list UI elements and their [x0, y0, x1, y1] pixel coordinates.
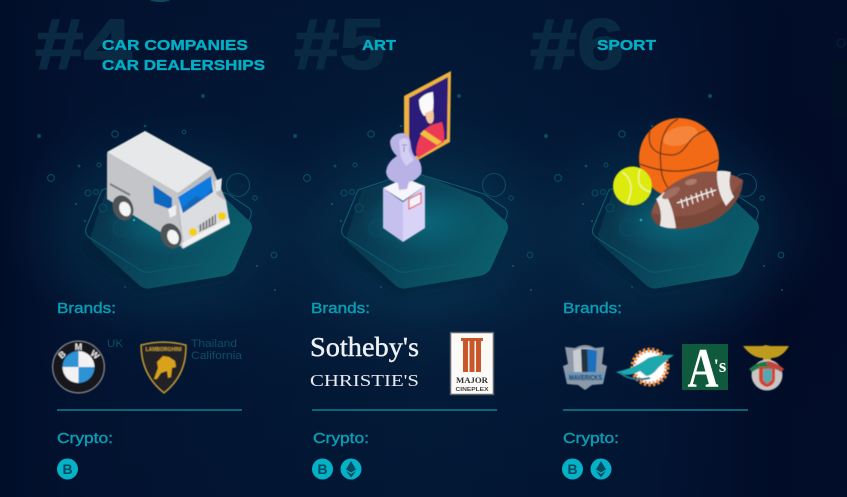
label: brands: Brands:: [57, 300, 116, 317]
logo: Christie's: CHRISTIE'S: [310, 371, 419, 390]
logo: Benfica: [743, 345, 789, 390]
panel: sport: [530, 6, 789, 480]
icon: tennis ball: [613, 166, 652, 206]
icon: bitcoin: [312, 458, 333, 480]
icon: bitcoin: B: [62, 461, 73, 477]
logo: Miami Dolphins: [616, 350, 674, 384]
hexagon platform: [544, 94, 784, 293]
icon: bitcoin: [57, 458, 78, 480]
logo: Major Cineplex: [450, 332, 494, 394]
rank number 4: #4: [35, 6, 133, 85]
logo: BMW: [52, 341, 104, 393]
logo: Oakland Athletics: A: [688, 338, 719, 400]
logo: BMW: M: [75, 342, 82, 352]
logo: Sotheby's: Sotheby's: [310, 332, 419, 362]
heading: car companies: [102, 37, 265, 74]
icon: ethereum: [590, 458, 612, 480]
rank number 6: #6: [530, 6, 624, 85]
logo: BMW: W: [88, 348, 102, 362]
logo: Dallas Mavericks: [563, 345, 607, 390]
logo: BMW: B: [56, 348, 68, 361]
logo: Dallas Mavericks: MAVERICKS: [569, 375, 602, 382]
icon: bust on pedestal: [383, 133, 425, 242]
hexagon platform: [293, 94, 533, 293]
label: crypto: Crypto:: [563, 430, 619, 447]
hexagon platform: [37, 94, 277, 293]
icon: basketball: [639, 118, 719, 198]
label: UK: UK: [107, 338, 124, 350]
label: crypto: Crypto:: [57, 430, 113, 447]
icon: ethereum: [340, 458, 362, 480]
label: Thailand California: California: [191, 350, 243, 362]
label: crypto: Crypto:: [313, 430, 369, 447]
icon: bitcoin: [562, 458, 583, 480]
logo: Oakland Athletics: 's: [714, 356, 726, 377]
label: brands: Brands:: [311, 300, 370, 317]
icon: american football: [651, 171, 743, 229]
label: brands: Brands:: [563, 300, 622, 317]
icon: bitcoin: B: [317, 461, 328, 477]
heading: car companies: CAR COMPANIES: [102, 37, 248, 54]
icon: bitcoin: B: [567, 461, 578, 477]
logo: Major Cineplex: CINEPLEX: [456, 387, 489, 393]
rank number 5: #5: [294, 6, 385, 85]
logo: Lamborghini: [141, 342, 186, 393]
heading: sport: SPORT: [597, 37, 656, 54]
panel: art: [293, 6, 533, 480]
heading: art: ART: [362, 37, 396, 54]
logo: Lamborghini: LAMBORGHINI: [146, 347, 182, 353]
heading: car companies: CAR DEALERSHIPS: [102, 57, 265, 74]
icon: painting: [404, 71, 451, 168]
icon: van: [107, 131, 230, 252]
panel: car companies: [35, 6, 277, 480]
label: Thailand California: Thailand: [191, 338, 237, 350]
logo: Major Cineplex: MAJOR: [456, 375, 489, 385]
label: Thailand California: [191, 338, 243, 362]
